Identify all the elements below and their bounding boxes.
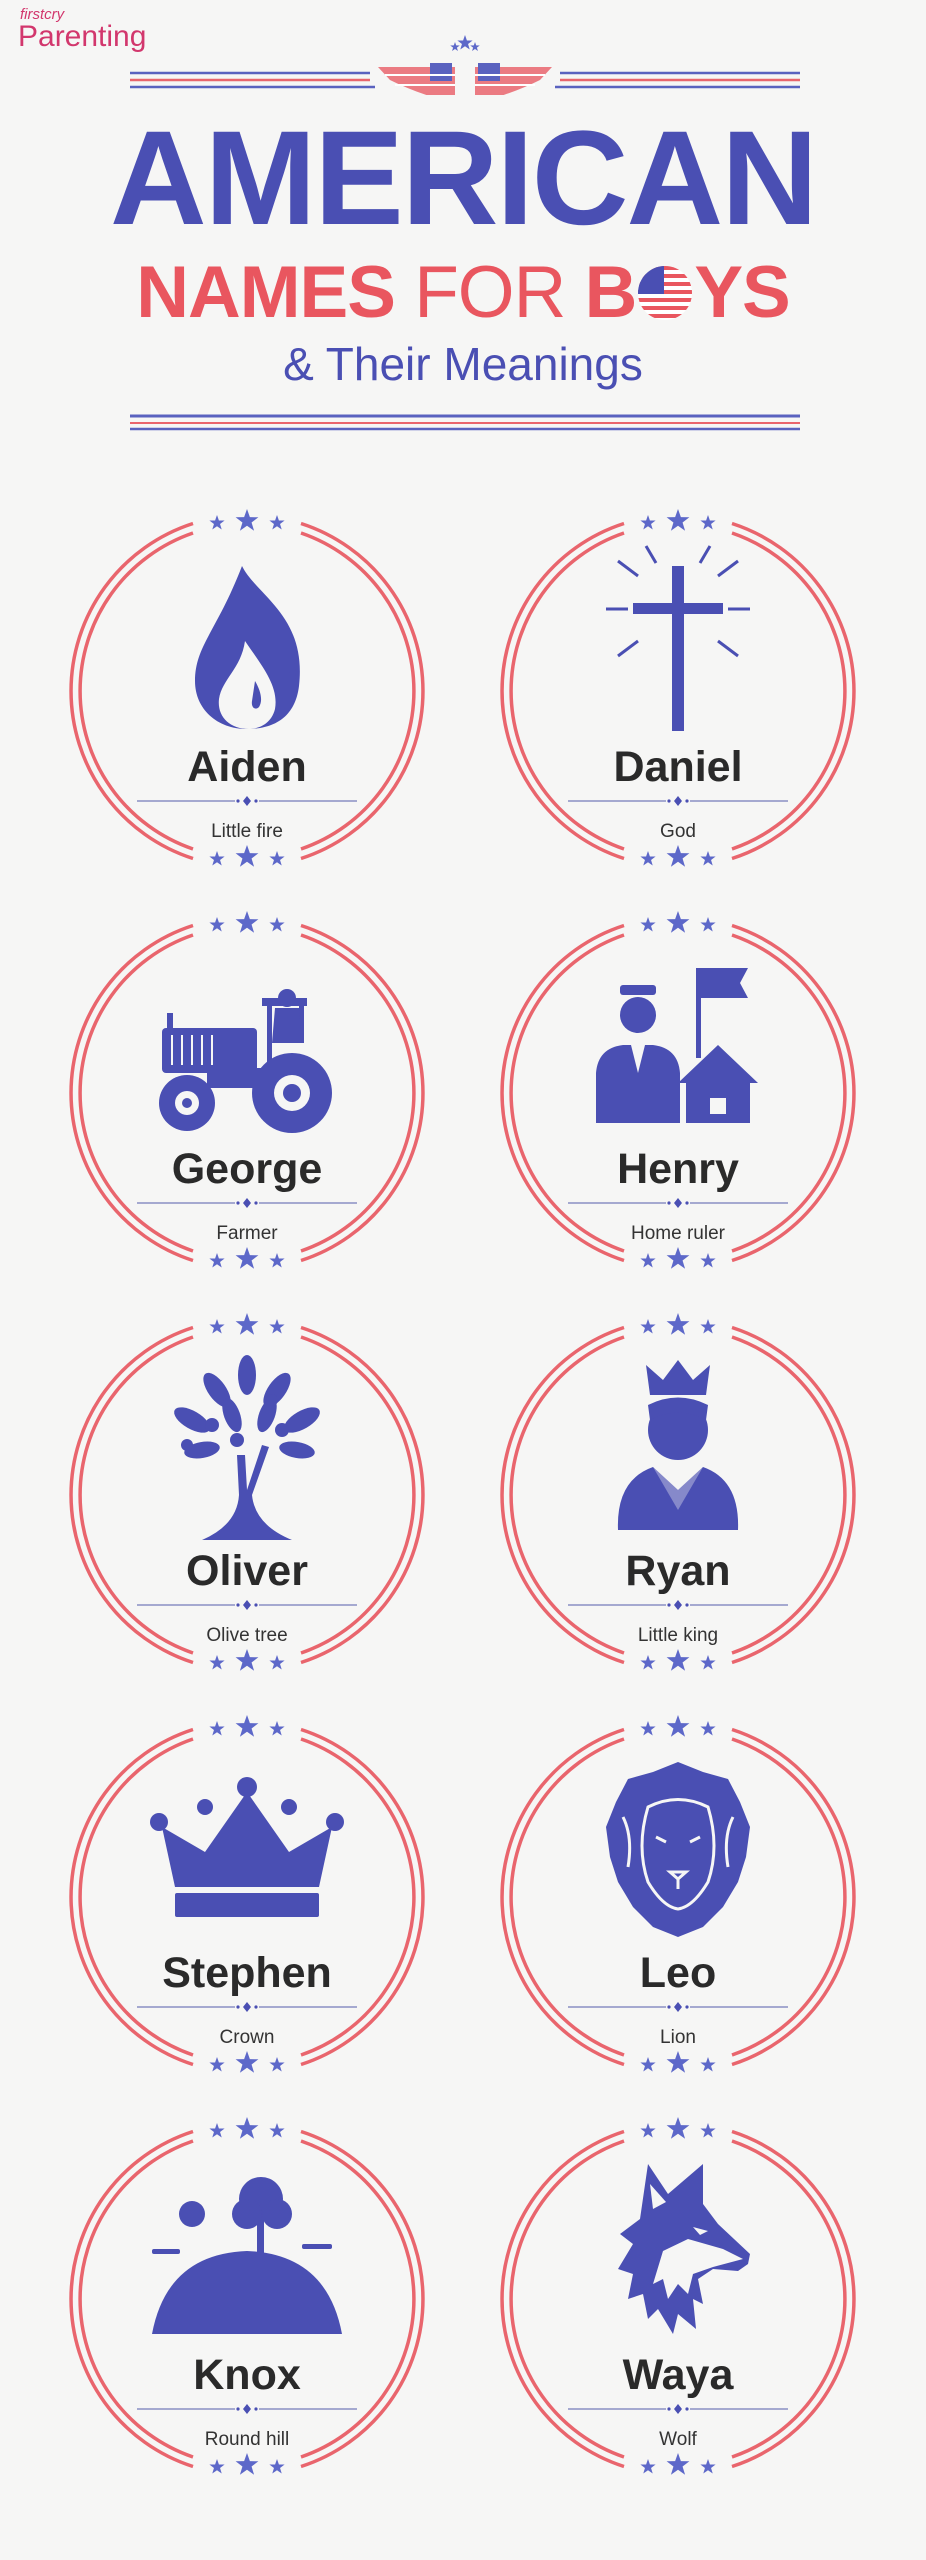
card: Waya: Waya bbox=[623, 2351, 734, 2399]
card: Ryan: Ryan bbox=[625, 1547, 731, 1595]
icon: tractor bbox=[159, 989, 332, 1133]
icon: crown bbox=[150, 1777, 344, 1917]
title: AMERICAN bbox=[110, 104, 816, 253]
card: Henry: Henry bbox=[617, 1145, 739, 1193]
card: Leo bbox=[500, 1715, 856, 2073]
card: Knox bbox=[69, 2117, 425, 2475]
card: Henry: Home ruler bbox=[631, 1223, 726, 1244]
card: Knox: Knox bbox=[193, 2351, 301, 2399]
card: Oliver: Oliver bbox=[186, 1547, 308, 1595]
title bbox=[110, 104, 816, 390]
card: Waya bbox=[500, 2117, 856, 2475]
card: George bbox=[69, 911, 425, 1269]
logo: Parenting bbox=[18, 20, 146, 53]
card: George: George bbox=[172, 1145, 322, 1193]
card: Ryan: Little king bbox=[638, 1625, 718, 1646]
icon: lion bbox=[606, 1762, 750, 1937]
card: Aiden: Little fire bbox=[211, 821, 283, 842]
card: Oliver bbox=[69, 1313, 425, 1671]
card: Waya: Wolf bbox=[659, 2429, 698, 2450]
card: Knox: Round hill bbox=[205, 2429, 289, 2450]
card: Leo: Lion bbox=[660, 2027, 696, 2048]
icon: olive tree bbox=[170, 1355, 324, 1540]
logo: firstcry bbox=[20, 6, 64, 23]
card: Aiden: Aiden bbox=[187, 743, 307, 791]
card: Stephen: Stephen bbox=[162, 1949, 332, 1997]
card: Leo: Leo bbox=[640, 1949, 716, 1997]
header emblem bbox=[130, 35, 800, 95]
card: Daniel bbox=[500, 509, 856, 867]
icon: cross bbox=[606, 546, 750, 731]
icon: wolf bbox=[618, 2164, 750, 2334]
card: George: Farmer bbox=[216, 1223, 278, 1244]
title: & Their Meanings bbox=[283, 338, 643, 390]
card: Stephen bbox=[69, 1715, 425, 2073]
icon: round hill bbox=[152, 2177, 342, 2334]
icon: little king bbox=[618, 1360, 738, 1530]
card: Oliver: Olive tree bbox=[206, 1625, 288, 1646]
card: Henry bbox=[500, 911, 856, 1269]
title: NAMES FOR B YS bbox=[136, 252, 790, 333]
card: Stephen: Crown bbox=[220, 2027, 274, 2048]
card: Daniel: God bbox=[660, 821, 696, 842]
icon: fire bbox=[195, 566, 300, 729]
card: Daniel: Daniel bbox=[613, 743, 743, 791]
icon: home ruler bbox=[596, 968, 758, 1123]
card: Ryan bbox=[500, 1313, 856, 1671]
header bottom lines bbox=[130, 414, 800, 430]
card: Aiden bbox=[69, 509, 425, 867]
